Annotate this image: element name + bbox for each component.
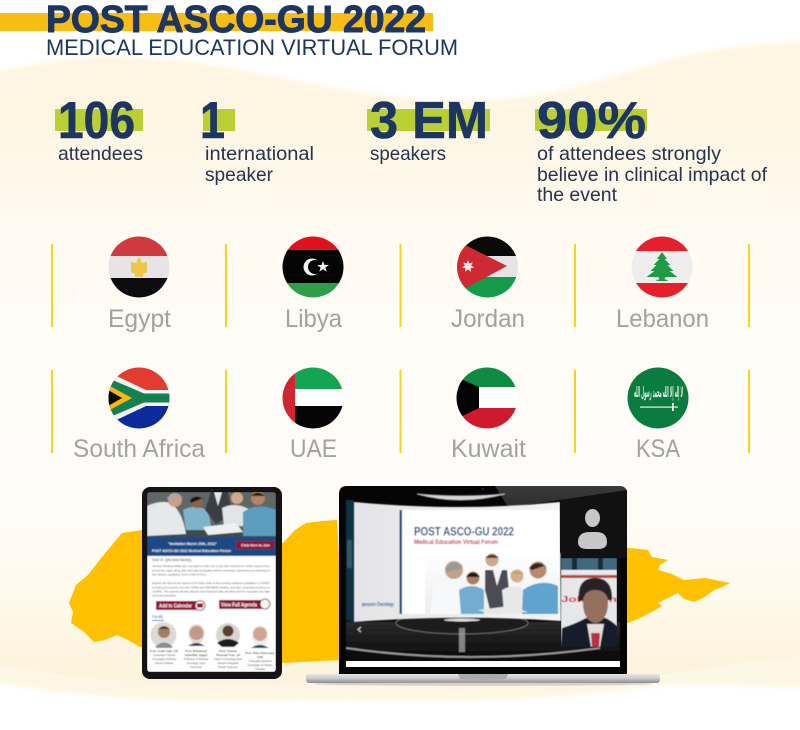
subtitle: MEDICAL EDUCATION VIRTUAL FORUM bbox=[46, 35, 458, 60]
studio floor and lights bbox=[346, 494, 620, 661]
country: egypt: Egypt bbox=[108, 305, 171, 333]
faculty portraits and names: University bbox=[190, 665, 203, 669]
country: jordan: Jordan bbox=[451, 305, 525, 333]
yellow brush stroke bbox=[69, 520, 730, 663]
stat: 1 international speaker: international bbox=[205, 143, 314, 165]
invitation body text: around the region along with international speakers will be presenting, discussing and reflecting on bbox=[152, 568, 270, 572]
presentation slide: Medical Education Virtual Forum bbox=[414, 539, 498, 546]
faculty portraits and names: Hospital bbox=[255, 667, 265, 671]
stat: 106 attendees: 106 bbox=[58, 92, 135, 150]
faculty portraits and names: Prof. Elias Deesouki, bbox=[245, 651, 275, 655]
faculty heading: Faculty bbox=[152, 614, 164, 619]
faculty portraits and names: Prof. Ahmed bbox=[219, 649, 237, 653]
invitation banner: Click Here to Join bbox=[241, 544, 270, 548]
country: lebanon: Lebanon bbox=[616, 305, 709, 333]
stat: 1 international speaker bbox=[200, 92, 314, 186]
country: kuwait bbox=[451, 367, 526, 463]
invitation banner: POST ASCO-GU 2022 Medical Education Forum bbox=[152, 549, 232, 553]
invitation body text: Experts will discuss the impact of the latest data on the evolving treatment paradigm in mHSPC bbox=[152, 581, 270, 585]
icon: kuwait flag bbox=[456, 367, 518, 429]
white bar bbox=[346, 661, 620, 667]
faculty portraits and names: Oncologist at Tawam bbox=[248, 663, 273, 667]
faculty portraits and names: UAE bbox=[257, 655, 263, 659]
country: libya bbox=[282, 236, 344, 333]
screen gloss bbox=[495, 486, 627, 558]
country: egypt bbox=[108, 236, 171, 333]
stat: 1 international speaker: 1 bbox=[200, 92, 225, 150]
country dividers bbox=[51, 244, 750, 453]
laptop bezel bbox=[339, 486, 627, 675]
stat: 3 em speakers: 3 EM bbox=[370, 92, 488, 150]
stat: 90 percent clinical impact: 90% bbox=[537, 92, 646, 150]
faculty portraits and names: Oncologist at Bristol bbox=[152, 657, 176, 661]
invitation body text: clinical practice. bbox=[152, 594, 177, 598]
view full agenda button bbox=[219, 599, 270, 609]
faculty heading bbox=[152, 614, 164, 621]
country: lebanon bbox=[618, 236, 708, 327]
faculty portraits and names: Istanbul Hospitals bbox=[217, 661, 239, 665]
faculty portraits and names: Head of Oncology Dept bbox=[214, 657, 242, 661]
invitation body text: Dear Dr. {{Account.Name}}, bbox=[152, 558, 192, 562]
icon: jordan flag bbox=[456, 236, 519, 298]
stat: 1 international speaker: speaker bbox=[205, 164, 273, 186]
icon: south africa flag bbox=[108, 367, 170, 429]
country: ksa bbox=[627, 367, 689, 463]
stat: 90 percent clinical impact: of attendees strongly bbox=[537, 143, 721, 165]
country: uae: UAE bbox=[290, 435, 337, 463]
tablet photo bbox=[147, 491, 276, 537]
country: uae bbox=[282, 368, 342, 457]
faculty portraits and names: Professor of Medical bbox=[184, 657, 209, 661]
presentation slide bbox=[354, 502, 561, 622]
invitation body text: including the journey from the TITAN and ARASENS studies, and also expanding horizons in bbox=[152, 586, 270, 590]
invitation body text: the latest updates from ASCO-GU. bbox=[152, 572, 207, 576]
add to calendar button bbox=[156, 600, 205, 610]
icon: uae flag bbox=[282, 367, 345, 430]
title: post asco-gu 2022: POST ASCO-GU 2022 bbox=[46, 0, 426, 41]
country: south africa bbox=[73, 367, 205, 463]
faculty portraits and names: Consultant Clinical bbox=[153, 653, 176, 657]
invitation banner: "Invitation March 25th, 2022" bbox=[168, 542, 217, 546]
invitation body text bbox=[152, 558, 271, 598]
invitation body text: Janssen Medical Affairs are very glad to invite you to join this virtual forum where experts from bbox=[152, 564, 271, 568]
invitation banner bbox=[147, 537, 276, 556]
laptop: virtual forum bbox=[306, 486, 660, 686]
presentation slide: janssen Oncology bbox=[361, 602, 394, 608]
country: south africa: South Africa bbox=[73, 435, 205, 463]
participant avatar tile bbox=[560, 490, 627, 558]
faculty portraits and names: Prof. Mohamed bbox=[185, 649, 207, 653]
invitation body text: mCRPC. The experts will also discuss how treatment data will affect and be integrated into daily bbox=[152, 590, 271, 594]
country: kuwait: Kuwait bbox=[451, 435, 526, 463]
slide photo: medical team bbox=[425, 552, 560, 614]
view full agenda button: View Full Agenda bbox=[221, 602, 257, 608]
faculty portraits and names: Cancer Institute bbox=[155, 661, 174, 665]
icon: lebanon flag bbox=[631, 236, 693, 298]
faculty portraits and names: Alhamdi Fraz, Uk bbox=[216, 653, 240, 657]
presentation slide: POST ASCO-GU 2022 bbox=[414, 524, 514, 538]
faculty portraits and names: Consultant Medical bbox=[249, 659, 272, 663]
country: ksa: KSA bbox=[636, 435, 680, 463]
icon: egypt flag bbox=[108, 236, 170, 298]
stat: 90 percent clinical impact: believe in clinical impact of bbox=[537, 164, 768, 186]
country: jordan bbox=[451, 236, 525, 333]
speaker video: Johnson bbox=[561, 595, 617, 604]
speaker video bbox=[561, 558, 617, 647]
faculty portraits and names: Health Sciences bbox=[218, 665, 238, 669]
stat: 3 em speakers: speakers bbox=[370, 143, 446, 165]
add to calendar button: Add to Calendar bbox=[159, 604, 192, 610]
faculty portraits and names: Prof. Arafa Zaki, UK bbox=[150, 649, 179, 653]
stat: 90 percent clinical impact bbox=[535, 92, 768, 206]
faculty portraits and names: Abdullah, Egypt bbox=[185, 653, 207, 657]
faculty portraits and names: Oncology, Cairo bbox=[186, 661, 206, 665]
laptop base bbox=[306, 674, 660, 686]
faculty portraits and names bbox=[150, 622, 275, 671]
stat: 90 percent clinical impact: the event bbox=[537, 184, 618, 206]
country: libya: Libya bbox=[285, 305, 342, 333]
icon: libya flag bbox=[282, 236, 344, 298]
stat: 106 attendees: attendees bbox=[58, 143, 143, 165]
tablet: email invitation bbox=[142, 487, 282, 679]
